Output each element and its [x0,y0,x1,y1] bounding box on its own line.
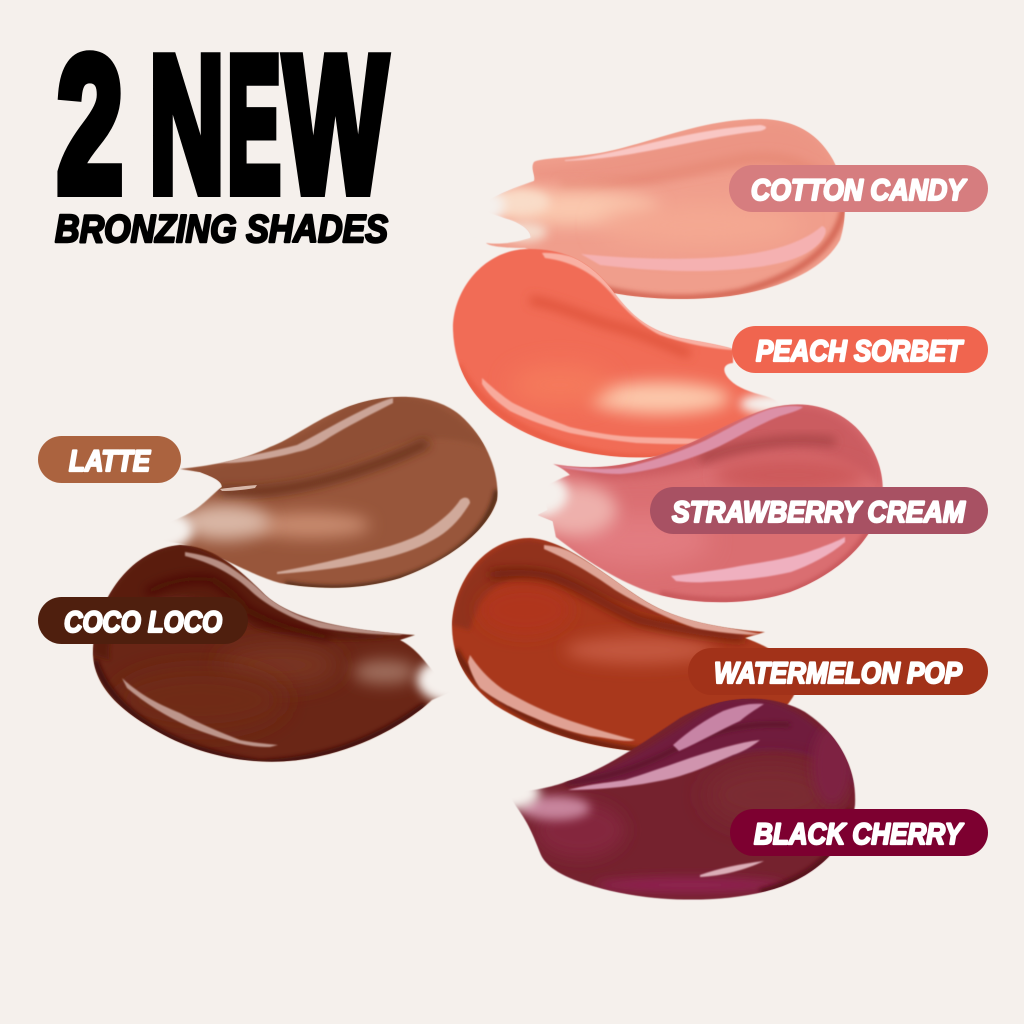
swatch: peach sorbet [453,249,810,458]
title: 2 NEW: E [227,16,281,232]
label: latte [38,436,181,483]
swatch: black cherry [514,698,856,900]
label: strawberry cream: STRAWBERRY CREAM [672,496,966,529]
label: peach sorbet [732,326,988,373]
swatch: latte [172,396,498,589]
label: watermelon pop [688,648,988,695]
label: latte: LATTE [69,445,151,478]
label: coco loco: COCO LOCO [64,606,222,639]
label: watermelon pop: WATERMELON POP [714,657,963,690]
title: 2 NEW: W [284,16,387,232]
swatch: cotton candy [445,119,846,299]
swatch: strawberry cream [508,405,885,602]
label: strawberry cream [650,487,988,534]
label: cotton candy [729,165,988,212]
swatch: coco loco [92,544,444,762]
label: peach sorbet: PEACH SORBET [756,335,964,368]
label: black cherry [730,809,988,856]
label: black cherry: BLACK CHERRY [754,818,965,851]
swatch: watermelon pop [452,538,800,752]
title: 2 NEW: 2 [57,16,123,232]
subtitle: bronzing shades: BRONZING SHADES [55,208,388,251]
label: cotton candy: COTTON CANDY [751,174,968,207]
label: coco loco [38,597,248,644]
title: 2 NEW: N [149,16,224,232]
